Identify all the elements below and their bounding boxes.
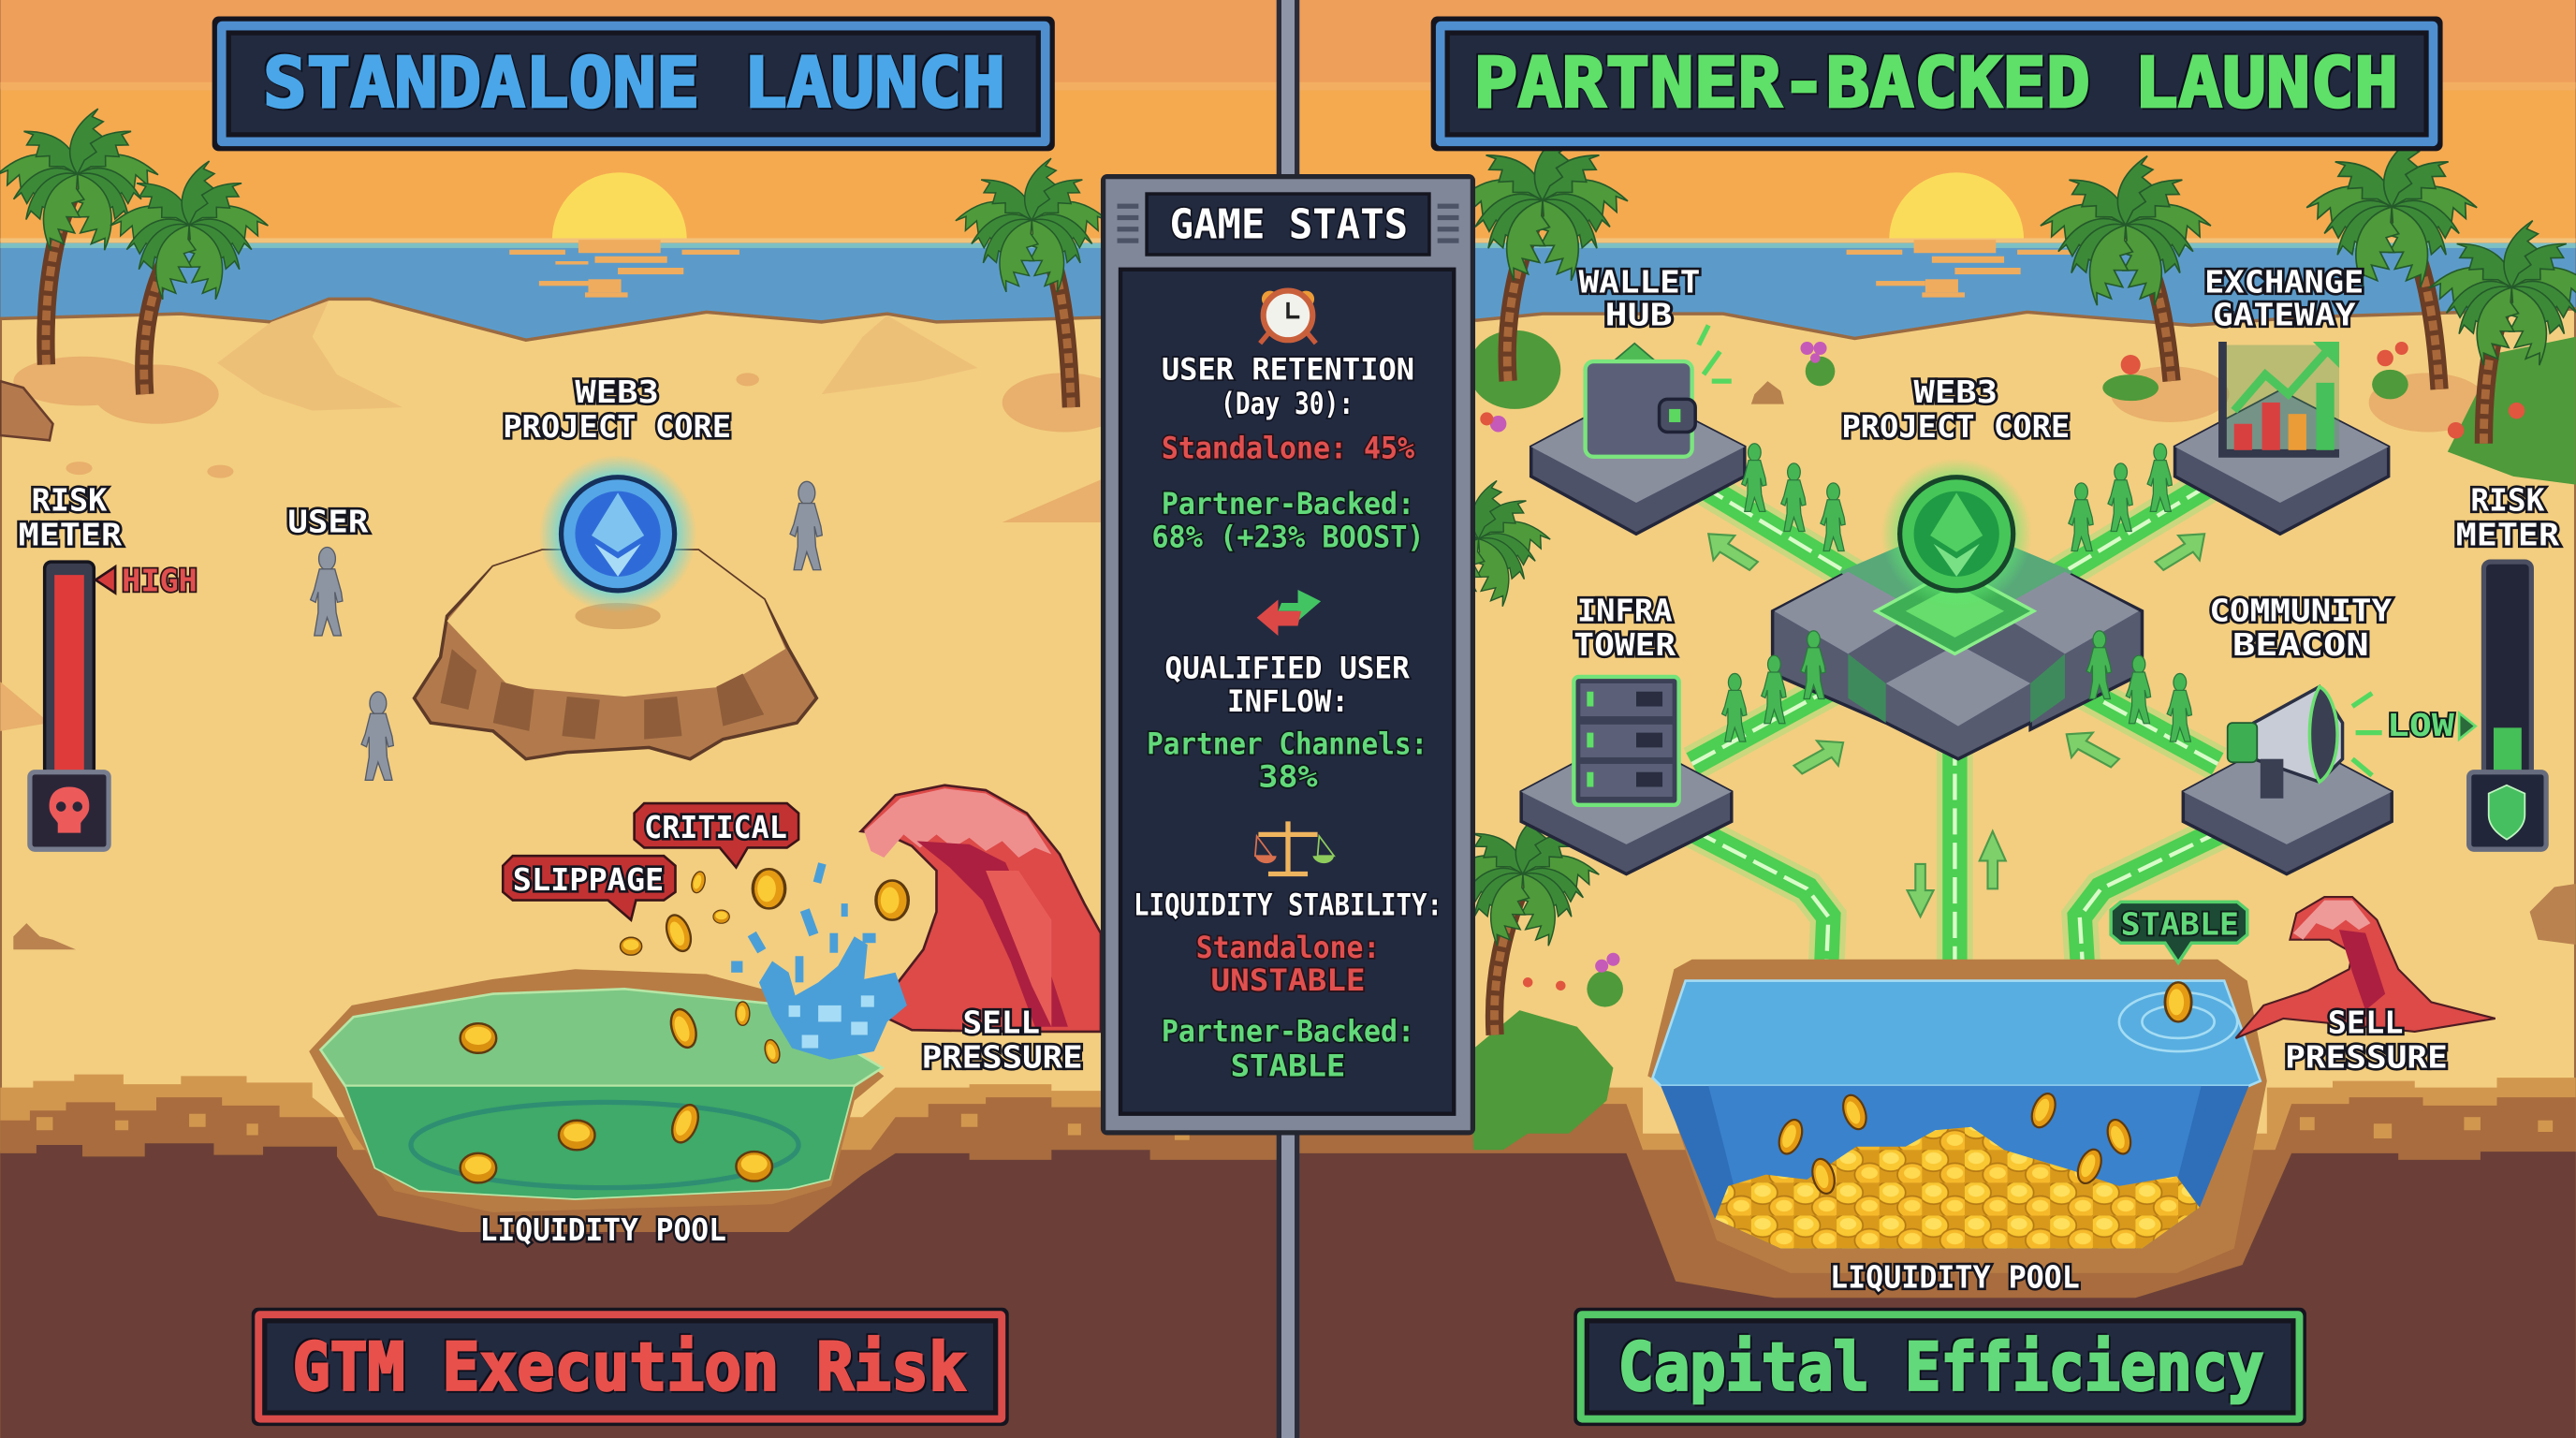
coin pile	[1715, 1127, 2200, 1249]
partner core hub platform	[1773, 522, 2142, 759]
center divider	[1277, 0, 1299, 1438]
ripples and stable coin	[2119, 992, 2237, 1051]
label: wallet hub: HUB	[1605, 296, 1673, 332]
icon: left rock	[0, 381, 76, 949]
stat: user retention: 68% (+23% BOOST)	[1151, 521, 1425, 554]
icon: standalone core orb	[539, 455, 696, 613]
stat: user retention: Standalone: 45%	[1162, 433, 1414, 466]
left palm trees	[0, 105, 1110, 407]
icon: wallet	[1586, 325, 1732, 457]
label: community beacon: COMMUNITY	[2209, 592, 2392, 628]
footer banner: capital efficiency	[1573, 1308, 2306, 1426]
right palms and foliage	[1405, 127, 2576, 1150]
label: risk meter (left): METER	[19, 517, 123, 553]
falling coins	[621, 869, 908, 955]
icon: growth chart	[2221, 342, 2339, 457]
icon: balance scale	[1255, 821, 1334, 874]
label: web3 project core (left): WEB3	[575, 374, 659, 410]
stat: user retention: (Day 30):	[1221, 388, 1354, 421]
exchange gateway platform	[2175, 342, 2389, 534]
label: exchange gateway: EXCHANGE	[2204, 263, 2364, 300]
stat: liquidity stability: STABLE	[1231, 1049, 1345, 1083]
label: sell pressure (left)	[922, 1005, 1083, 1076]
callout: slippage	[503, 856, 675, 920]
icon: stump platform	[414, 550, 816, 759]
community beacon platform	[2183, 686, 2392, 874]
label: sell pressure (left): SELL	[963, 1005, 1040, 1041]
label: liquidity pool (left): LIQUIDITY POOL	[480, 1211, 726, 1248]
icon: shield	[2489, 785, 2525, 840]
label: risk meter (left)	[19, 482, 123, 553]
label: web3 project core (right): WEB3	[1914, 374, 1998, 410]
label: low: LOW	[2387, 707, 2455, 743]
title banner: standalone launch: STANDALONE LAUNCH	[263, 44, 1005, 124]
footer banner: gtm execution risk: GTM Execution Risk	[293, 1328, 966, 1405]
label: risk meter (right): RISK	[2470, 482, 2544, 519]
stat: liquidity stability: Partner-Backed:	[1162, 1015, 1414, 1049]
stat: qualified user inflow: 38%	[1258, 761, 1318, 795]
label: infra tower	[1573, 592, 1676, 663]
label: community beacon: BEACON	[2232, 626, 2369, 663]
panel header	[1118, 194, 1458, 255]
label: user: USER	[287, 504, 369, 540]
flow arrows	[1708, 534, 2204, 917]
callout: stable: STABLE	[2121, 905, 2239, 942]
label: wallet hub: WALLET	[1579, 263, 1700, 300]
footer banner: gtm execution risk	[252, 1308, 1009, 1426]
label: low	[2387, 707, 2476, 743]
label: sell pressure (right): PRESSURE	[2285, 1039, 2448, 1076]
panel: game stats	[1101, 174, 1475, 1136]
title banner: partner-backed launch: PARTNER-BACKED LAUNCH	[1473, 44, 2398, 124]
icon: skull	[50, 787, 89, 833]
stat: liquidity stability: UNSTABLE	[1211, 964, 1365, 998]
title banner: partner-backed launch	[1431, 17, 2443, 151]
callout: critical	[635, 803, 798, 867]
callout: critical: CRITICAL	[644, 809, 787, 845]
icon: sell pressure wave (large)	[861, 785, 1101, 1032]
icon: right sun	[1889, 172, 2024, 240]
ocean	[0, 238, 2576, 345]
stat: qualified user inflow: QUALIFIED USER	[1164, 653, 1411, 686]
scene background: sunset sky	[0, 0, 2576, 242]
label: exchange gateway: GATEWAY	[2213, 296, 2356, 332]
label: infra tower: INFRA	[1577, 592, 1673, 628]
right liquidity pool	[1647, 960, 2267, 1273]
green users	[1722, 444, 2191, 741]
title banner: standalone launch	[212, 17, 1055, 151]
label: sell pressure (left): PRESSURE	[922, 1039, 1083, 1076]
gray users	[311, 481, 822, 780]
infra tower platform	[1521, 677, 1732, 874]
label: web3 project core (left): PROJECT CORE	[503, 408, 731, 445]
icon: sell pressure wave (small)	[2235, 897, 2496, 1038]
risk meter high	[30, 562, 109, 849]
label: infra tower: TOWER	[1573, 626, 1676, 663]
label: web3 project core (right): PROJECT CORE	[1841, 408, 2070, 445]
panel header: GAME STATS	[1170, 200, 1408, 248]
label: web3 project core (right)	[1841, 374, 2070, 445]
water splash	[731, 862, 907, 1060]
icon: megaphone	[2228, 686, 2382, 799]
label: wallet hub	[1579, 263, 1700, 332]
stat: liquidity stability: Standalone:	[1196, 932, 1380, 965]
soil layers	[0, 1075, 2576, 1438]
stat: qualified user inflow: Partner Channels:	[1147, 727, 1427, 761]
label: sell pressure (right): SELL	[2328, 1005, 2403, 1041]
stat: qualified user inflow	[1147, 653, 1427, 795]
callout: slippage: SLIPPAGE	[513, 861, 664, 898]
label: risk meter (left): RISK	[32, 482, 107, 519]
submerged coins	[1775, 1117, 1807, 1157]
footer banner: capital efficiency: Capital Efficiency	[1618, 1328, 2263, 1405]
stat: liquidity stability: LIQUIDITY STABILITY:	[1134, 888, 1442, 922]
left liquidity pool	[309, 969, 884, 1212]
sand beach	[0, 299, 2576, 1150]
label: liquidity pool (right): LIQUIDITY POOL	[1830, 1259, 2080, 1296]
stat: qualified user inflow: INFLOW:	[1227, 685, 1349, 719]
stat: user retention: USER RETENTION	[1162, 353, 1414, 387]
stat: user retention	[1151, 353, 1425, 554]
label: exchange gateway	[2204, 263, 2364, 332]
icon: server rack	[1573, 677, 1679, 805]
callout: stable	[2111, 902, 2247, 962]
label: risk meter (right)	[2456, 482, 2560, 553]
icon: partner core orb	[1881, 459, 2032, 609]
coins in shallow pool	[461, 1023, 496, 1053]
icon: left sun	[552, 172, 687, 240]
stat: user retention: Partner-Backed:	[1162, 488, 1414, 521]
label: risk meter (right): METER	[2456, 517, 2560, 553]
risk meter low	[2469, 562, 2546, 849]
icon: alarm clock	[1260, 291, 1316, 344]
wallet hub platform	[1531, 325, 1745, 534]
label: web3 project core (left)	[503, 374, 731, 445]
energy beams	[1692, 485, 2224, 999]
label: sell pressure (right)	[2285, 1005, 2448, 1076]
stat: liquidity stability	[1134, 888, 1442, 1083]
icon: exchange arrows	[1257, 590, 1321, 636]
label: high: HIGH	[122, 563, 198, 599]
label: community beacon	[2209, 592, 2392, 663]
